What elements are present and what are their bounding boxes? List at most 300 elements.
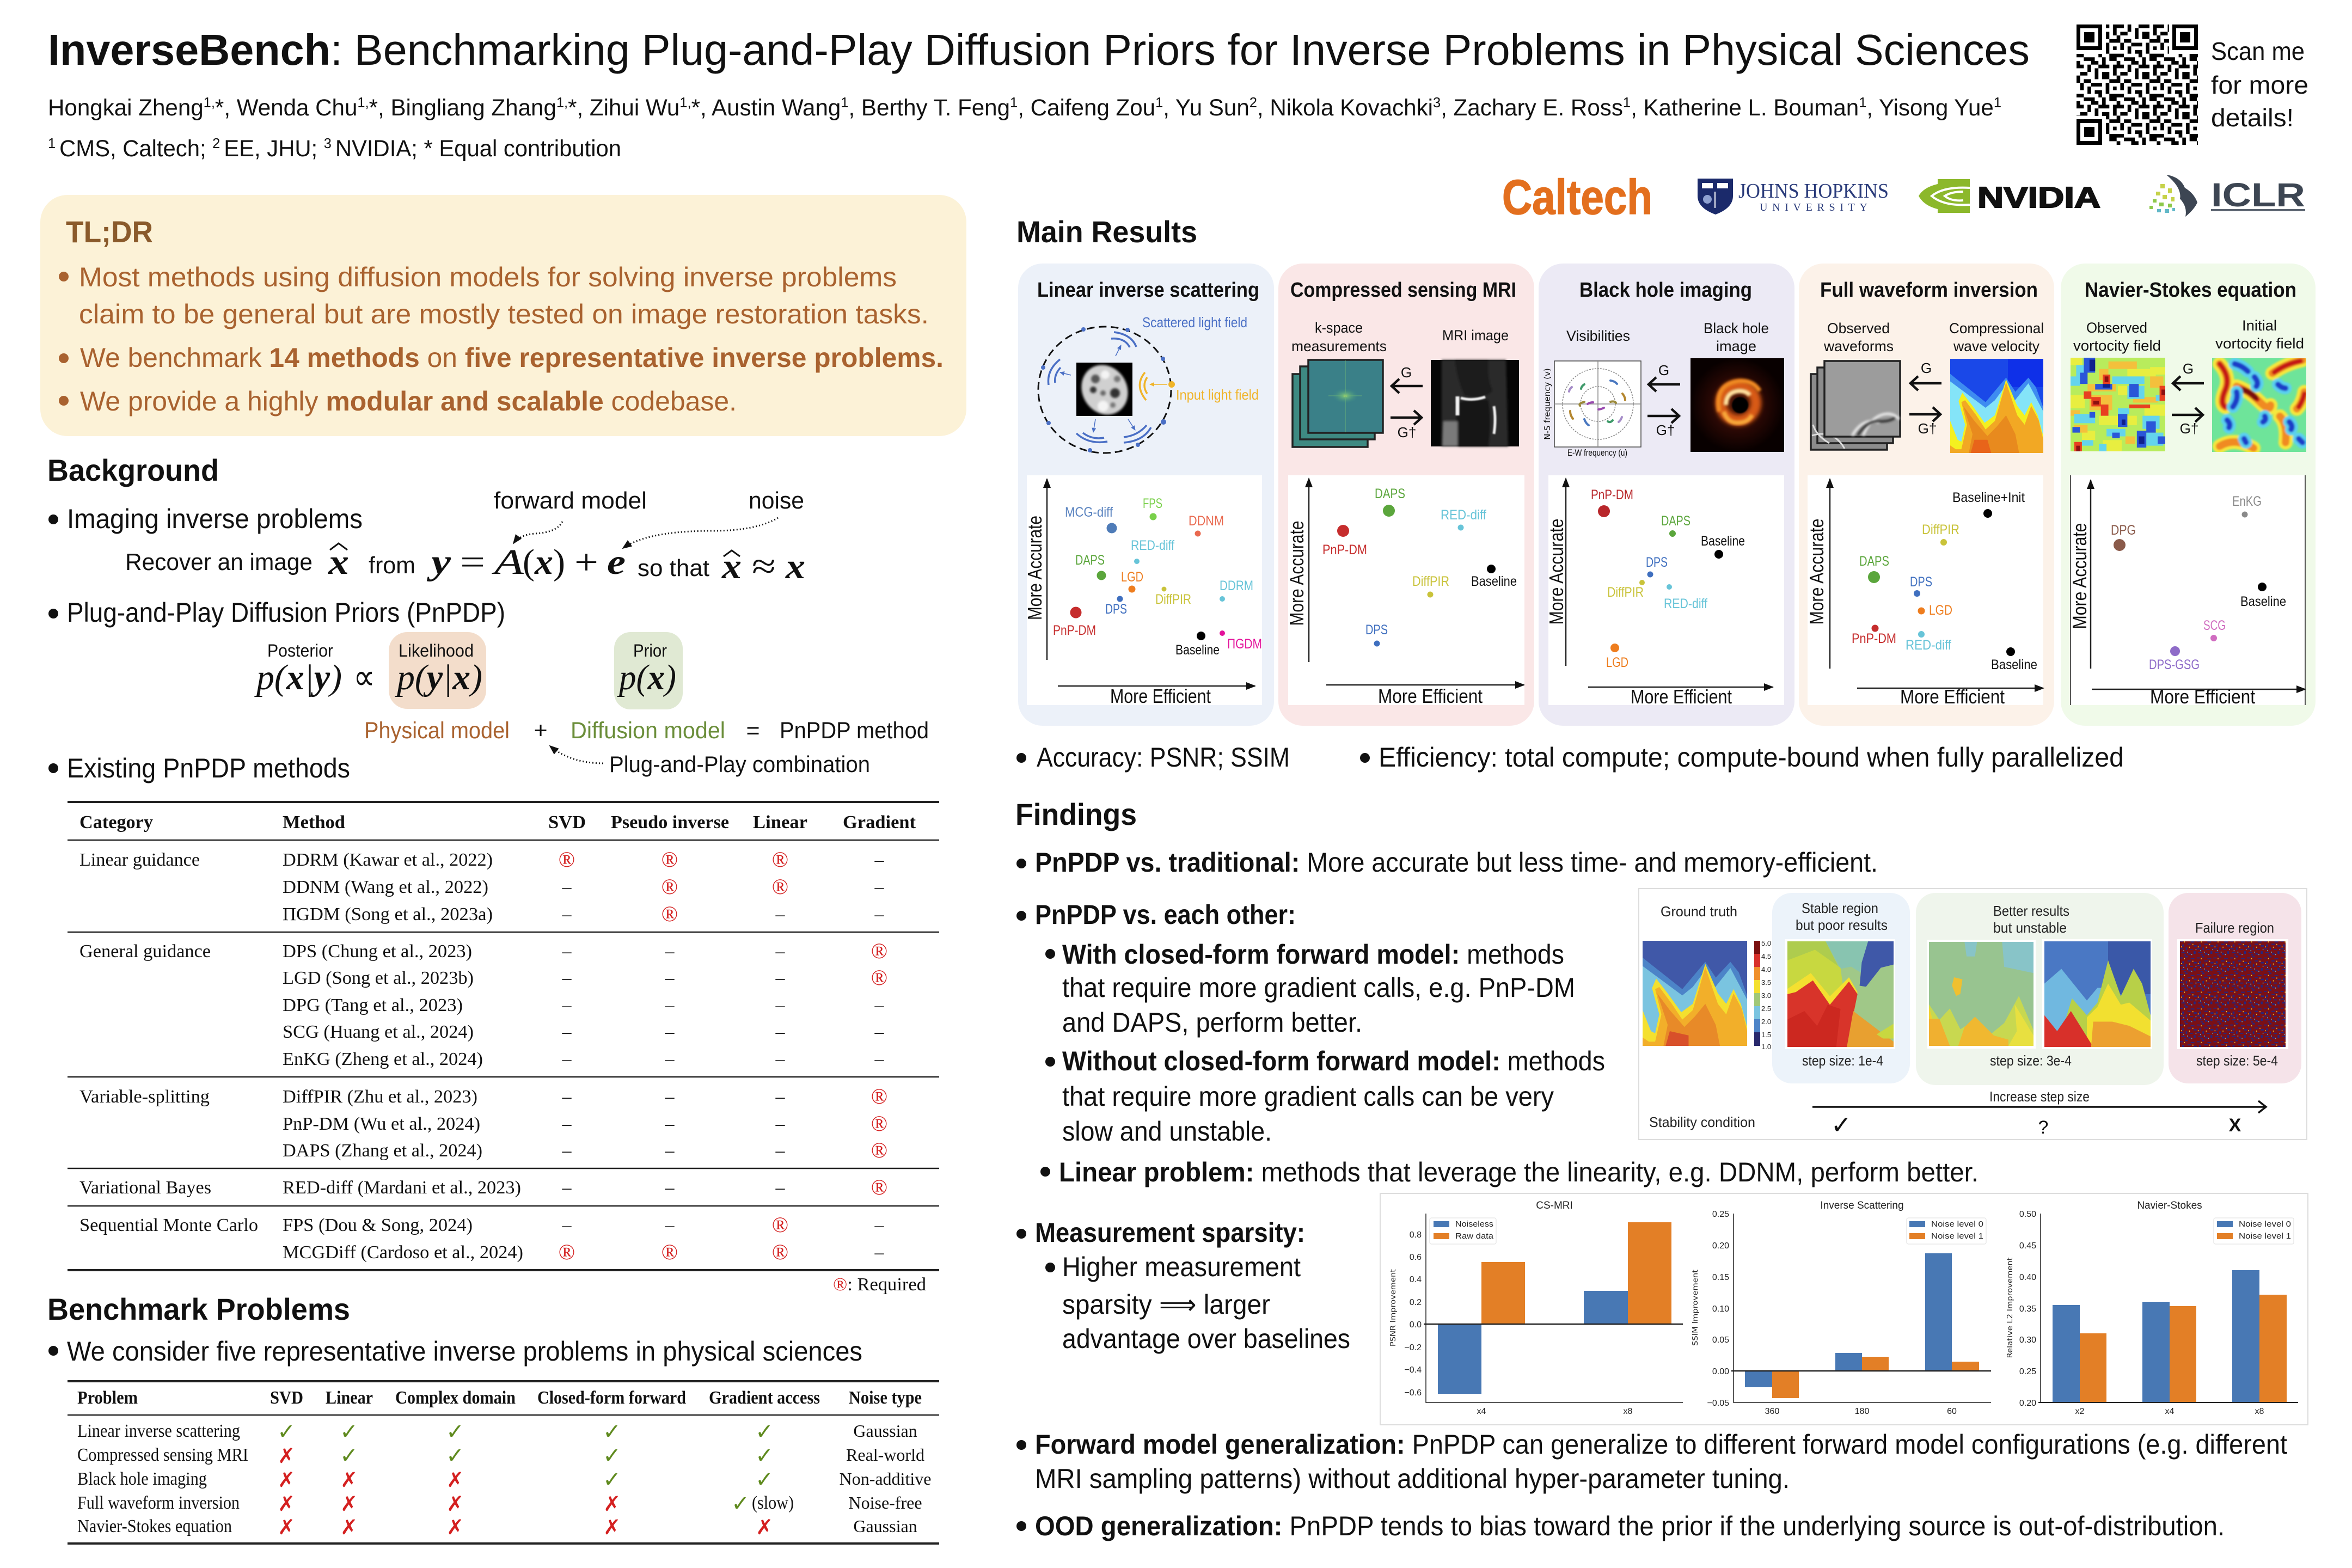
scatter chart: accuracy vs efficiency: Baseline+Init — [1952, 490, 2025, 505]
equation: forward problem: + — [574, 542, 598, 582]
table header: Gradient — [843, 812, 916, 832]
group: sequential Monte Carlo: FPS (Dou & Song, 2024) — [283, 1215, 473, 1235]
bar chart: Navier-Stokes: 0.50 — [2019, 1210, 2036, 1219]
affiliations: 2 — [212, 135, 224, 151]
QR caption: for more — [2211, 71, 2308, 99]
annotation: noise — [623, 487, 804, 548]
illustration: k-space and MRI: G† — [1398, 424, 1416, 440]
scatter chart: accuracy vs efficiency: More Efficient — [1378, 685, 1483, 707]
scatter chart: accuracy vs efficiency: DAPS — [1661, 513, 1690, 529]
illustration: visibilities and black hole: G — [1658, 362, 1669, 378]
formula: PnPDP combination — [364, 718, 929, 744]
authors: *, Zihui Wu — [568, 95, 679, 121]
authors: , Yisong Yue — [1866, 95, 1994, 121]
authors: 1, — [556, 94, 568, 111]
table header: Linear — [326, 1388, 373, 1408]
finding: vs each other: PnPDP vs. each other: — [1035, 899, 1296, 930]
bar chart: inverse scattering: 0.15 — [1712, 1273, 1729, 1282]
logo: Caltech: Caltech — [1502, 170, 1652, 225]
authors: 1 — [841, 94, 848, 111]
equation: forward problem: e — [607, 542, 626, 582]
bar chart: CS-MRI: 0.0 — [1410, 1320, 1422, 1330]
authors: 2 — [1250, 94, 1257, 111]
row: full waveform inversion: ✗✗✗✗ — [278, 1492, 621, 1516]
table header: Noise type — [849, 1388, 922, 1408]
scatter chart: accuracy vs efficiency: FPS — [1143, 496, 1162, 511]
group: variable-splitting: ––– — [562, 1141, 785, 1161]
table: benchmark problems — [68, 1380, 939, 1545]
arrow: increase step size: Increase step size — [1989, 1088, 2090, 1105]
scatter chart: accuracy vs efficiency: DPS — [1646, 555, 1668, 570]
affiliations: 3 — [324, 135, 335, 151]
bullet: accuracy metrics: Accuracy: PSNR; SSIM — [1037, 742, 1290, 773]
scatter chart: accuracy vs efficiency: PnP-DM — [1322, 542, 1367, 558]
logo: NVIDIA: NVIDIA — [1977, 181, 2100, 214]
bar chart: Navier-Stokes — [2006, 1200, 2298, 1416]
scatter chart: accuracy vs efficiency: Baseline — [1701, 534, 1745, 549]
scatter chart: accuracy vs efficiency: DPS — [1910, 574, 1932, 590]
scatter chart: accuracy vs efficiency: More Efficient — [1631, 685, 1732, 708]
scatter chart: accuracy vs efficiency: More Accurate — [1285, 520, 1308, 626]
authors: , Caifeng Zou — [1018, 95, 1155, 121]
bullet: most methods — [59, 262, 929, 329]
QR caption: details! — [2211, 103, 2294, 132]
row: black hole imaging: Non-additive — [840, 1469, 931, 1489]
scatter chart: accuracy vs efficiency: DAPS — [1859, 554, 1889, 569]
scatter chart: accuracy vs efficiency: DDNM — [1189, 513, 1224, 529]
panel: TL;DR — [40, 195, 966, 436]
scatter chart: accuracy vs efficiency: ΠGDM — [1227, 636, 1262, 652]
group: sequential Monte Carlo: MCGDiff (Cardoso et al., 2024) — [283, 1242, 523, 1263]
scatter chart: accuracy vs efficiency: EnKG — [2232, 494, 2262, 509]
bar chart: CS-MRI: PSNR Improvement — [1389, 1269, 1398, 1346]
row: Navier-Stokes equation: Navier-Stokes equation — [77, 1516, 232, 1536]
table header: Method — [283, 812, 345, 832]
equation: posterior: Posterior — [267, 641, 333, 660]
panel: Navier-Stokes equation — [2061, 264, 2316, 726]
group: linear guidance: ®®® — [559, 847, 788, 872]
scatter chart: accuracy vs efficiency: DAPS — [1375, 486, 1405, 501]
finding: measurement sparsity: Measurement sparsity: — [1035, 1217, 1305, 1248]
equation: forward problem: ≈ — [752, 547, 776, 586]
bar chart: Navier-Stokes: 0.40 — [2019, 1273, 2036, 1282]
group: variable-splitting: DAPS (Zhang et al., 2024) — [283, 1141, 482, 1161]
group: linear guidance: ––– — [562, 904, 884, 924]
illustration: visibilities and black hole: Visibilities — [1566, 328, 1630, 344]
scatter chart: accuracy vs efficiency: DDRM — [1220, 578, 1253, 593]
group: general guidance: –––– — [562, 1049, 884, 1069]
group: variational Bayes: ––– — [562, 1178, 785, 1198]
group: sequential Monte Carlo: Sequential Monte Carlo — [79, 1215, 258, 1235]
bar chart: Navier-Stokes: 0.25 — [2019, 1367, 2036, 1376]
bullet: imaging inverse problems: Imaging inverse problems — [67, 504, 363, 534]
scatter chart: accuracy vs efficiency: DiffPIR — [1607, 585, 1644, 600]
affiliations: NVIDIA; * Equal contribution — [335, 136, 621, 162]
scatter chart: accuracy vs efficiency: Baseline — [1991, 657, 2037, 672]
ground truth map: 5.0 — [1761, 939, 1771, 947]
authors: *, Wenda Chu — [215, 95, 357, 121]
illustration: k-space and MRI: k-space — [1315, 320, 1363, 336]
equation: posterior — [254, 641, 375, 698]
stability condition row: X — [2229, 1115, 2241, 1136]
group: sequential Monte Carlo: ®®® — [559, 1240, 788, 1264]
authors: , Berthy T. Feng — [848, 95, 1010, 121]
scatter chart: accuracy vs efficiency: RED-diff — [1906, 638, 1951, 653]
failure region: Failure region — [2195, 920, 2274, 936]
authors: 1 — [1623, 94, 1631, 111]
figure: sparsity bar charts — [1380, 1193, 2308, 1425]
title: InverseBench: Benchmarking Plug-and-Play Diffusion Priors for Inverse Problems in Physical Sciences — [48, 26, 2030, 74]
table header: Category — [79, 812, 153, 832]
authors: 1, — [357, 94, 369, 111]
logo: Johns Hopkins — [1698, 179, 1889, 215]
bar chart: CS-MRI: x8 — [1624, 1407, 1633, 1416]
bullet: efficiency metrics: Efficiency: total compute; compute-bound when fully parallelized — [1379, 742, 2124, 773]
bar chart: Navier-Stokes: x8 — [2255, 1407, 2264, 1416]
annotation: plug-and-play combination — [550, 746, 870, 777]
scatter chart: accuracy vs efficiency: LGD — [1606, 655, 1628, 670]
stable region: Stable region — [1802, 900, 1878, 916]
bar chart: inverse scattering: 360 — [1765, 1407, 1779, 1416]
row: compressed sensing MRI: Real-world — [846, 1445, 924, 1465]
illustration: waveforms and velocity: Compressional — [1949, 320, 2044, 336]
arrow: increase step size — [1812, 1088, 2266, 1113]
scatter chart: accuracy vs efficiency — [1024, 475, 1262, 707]
equation: forward problem: A — [492, 542, 524, 582]
scatter chart: accuracy vs efficiency: RED-diff — [1131, 538, 1174, 553]
bar chart: Navier-Stokes: 0.30 — [2019, 1336, 2036, 1345]
logo: ICLR: ICLR — [2211, 176, 2305, 213]
illustration: waveforms and velocity: G† — [1918, 420, 1937, 437]
group: variable-splitting: ––– — [562, 1114, 785, 1134]
group: sequential Monte Carlo: ® — [772, 1212, 788, 1237]
table header — [79, 812, 916, 832]
equation: forward problem: Recover an image — [125, 549, 313, 575]
logo: ICLR — [2149, 175, 2305, 217]
stability condition row: Stability condition — [1649, 1114, 1755, 1130]
group: linear guidance — [79, 847, 884, 926]
finding: vs each other — [1016, 899, 1979, 1187]
formula: PnPDP combination: = — [746, 718, 760, 744]
group: variational Bayes: ® — [871, 1175, 887, 1199]
box: likelihood — [389, 632, 486, 709]
annotation: plug-and-play combination: Plug-and-Play combination — [609, 751, 870, 777]
figure: stability vs step size — [1639, 889, 2307, 1140]
bar chart: inverse scattering: 0.05 — [1712, 1336, 1729, 1345]
ground truth map: 3.5 — [1761, 978, 1771, 987]
sub-finding: linear problem: Linear problem: methods that leverage the linearity, e.g. DDNM, perform better. — [1059, 1157, 1979, 1187]
illustration: scattering setup: Scattered light field — [1142, 314, 1247, 330]
group: linear guidance: DDRM (Kawar et al., 2022) — [283, 850, 493, 870]
sub-finding: with closed-form: and DAPS, perform better. — [1062, 1007, 1362, 1038]
bar chart: inverse scattering: 0.25 — [1712, 1210, 1729, 1219]
illustration: vorticity fields — [2071, 317, 2306, 452]
table header: SVD — [270, 1388, 303, 1408]
sub-finding: without closed-form — [1045, 1046, 1605, 1147]
equation: forward problem: ( — [523, 542, 535, 582]
row: full waveform inversion: Noise-free — [848, 1493, 922, 1512]
ground truth map: 2.5 — [1761, 1004, 1771, 1013]
finding: measurement sparsity: sparsity ⟹ larger — [1062, 1289, 1270, 1320]
heading: TL;DR: TL;DR — [66, 215, 153, 249]
authors: , Yu Sun — [1163, 95, 1250, 121]
bar chart: Navier-Stokes: 0.45 — [2019, 1241, 2036, 1251]
illustration: k-space and MRI: MRI image — [1442, 327, 1509, 344]
illustration: waveforms and velocity: waveforms — [1823, 338, 1894, 354]
group: sequential Monte Carlo — [79, 1212, 884, 1264]
logo: Johns Hopkins: JOHNS HOPKINS — [1738, 180, 1889, 203]
illustration: visibilities and black hole: Black hole — [1704, 320, 1769, 336]
row: compressed sensing MRI: Compressed sensing MRI — [77, 1445, 248, 1465]
equation: forward problem: y — [426, 542, 451, 582]
table header: Pseudo inverse — [611, 812, 729, 832]
table legend: required: ®: Required — [833, 1275, 926, 1295]
bar chart: Navier-Stokes: x2 — [2075, 1407, 2085, 1416]
panel title: Full waveform inversion — [1820, 279, 2038, 302]
row: compressed sensing MRI: ✗ — [278, 1444, 295, 1468]
affiliations: EE, JHU; — [224, 136, 324, 162]
failure region: step size: 5e-4 — [2196, 1052, 2278, 1069]
finding: measurement sparsity: advantage over baselines — [1062, 1324, 1350, 1354]
panel title: Black hole imaging — [1579, 279, 1752, 302]
bar chart: CS-MRI: −0.4 — [1404, 1365, 1422, 1375]
authors: 1, — [204, 94, 215, 111]
illustration: waveforms and velocity: Observed — [1827, 320, 1890, 336]
sub-finding: without closed-form: that require more gradient calls can be very — [1062, 1081, 1554, 1112]
group: general guidance: –––– — [562, 995, 884, 1015]
ground truth map: 4.5 — [1761, 952, 1771, 960]
finding: measurement sparsity — [1016, 1217, 1350, 1354]
affiliations: CMS, Caltech; — [59, 136, 212, 162]
ground truth map — [1643, 903, 1771, 1051]
bullet: codebase: We provide a highly modular and scalable codebase. — [80, 386, 737, 416]
row: black hole imaging — [77, 1467, 931, 1492]
bullet: most methods: claim to be general but are mostly tested on image restoration tasks. — [79, 299, 929, 329]
bar chart: CS-MRI: 0.8 — [1410, 1230, 1422, 1240]
row: Navier-Stokes equation — [77, 1515, 917, 1539]
bar chart: inverse scattering: 0.00 — [1712, 1367, 1729, 1376]
finding: vs traditional: PnPDP vs. traditional: More accurate but less time- and memory-efficient. — [1035, 847, 1878, 878]
failure region — [2169, 893, 2301, 1083]
row: full waveform inversion — [77, 1491, 922, 1516]
panel: black hole imaging — [1539, 264, 1794, 726]
row: linear inverse scattering: ✓✓✓✓✓ — [277, 1419, 774, 1444]
scatter chart: accuracy vs efficiency: More Accurate — [1805, 518, 1828, 625]
bar chart: inverse scattering: −0.05 — [1707, 1399, 1729, 1408]
illustration: vorticity fields: Initial — [2242, 317, 2277, 334]
bar chart: inverse scattering: 0.20 — [1712, 1241, 1729, 1251]
scatter chart: accuracy vs efficiency: DiffPIR — [1412, 574, 1449, 589]
QR caption: Scan me — [2211, 37, 2305, 65]
authors: 1 — [1859, 94, 1866, 111]
bullet: PnPDP: Plug-and-Play Diffusion Priors (PnPDP) — [67, 597, 505, 628]
group: general guidance: DPS (Chung et al., 2023) — [283, 941, 472, 961]
equation: forward problem: x — [534, 542, 553, 582]
box: prior: p(x) — [617, 658, 676, 697]
table header: Complex domain — [395, 1388, 516, 1408]
heading: Background: Background — [47, 453, 219, 487]
authors: , Katherine L. Bouman — [1631, 95, 1859, 121]
equation: forward problem: x — [785, 547, 805, 586]
stability condition row — [1649, 1110, 2241, 1140]
group: general guidance: EnKG (Zheng et al., 2024) — [283, 1049, 483, 1069]
authors: 3 — [1433, 94, 1441, 111]
better results: but unstable — [1993, 920, 2067, 936]
row: black hole imaging: ✓✓ — [603, 1467, 774, 1492]
ground truth map: 2.0 — [1761, 1018, 1771, 1026]
bar chart: inverse scattering: SSIM Improvement — [1692, 1270, 1700, 1346]
bar chart: inverse scattering: Noise level 1 — [1931, 1232, 1983, 1241]
panel title: Linear inverse scattering — [1037, 279, 1259, 302]
illustration: scattering setup: Input light field — [1176, 387, 1259, 403]
ground truth map: 4.0 — [1761, 965, 1771, 973]
equation: forward problem — [125, 542, 805, 586]
better results — [1916, 893, 2164, 1085]
bar chart: inverse scattering: Inverse Scattering — [1820, 1200, 1904, 1211]
group: general guidance — [79, 939, 887, 1069]
annotation: forward model — [494, 487, 647, 543]
bullet: existing methods: Existing PnPDP methods — [67, 753, 350, 783]
bar chart: CS-MRI: −0.2 — [1404, 1343, 1422, 1352]
bar chart: inverse scattering: Noise level 0 — [1931, 1220, 1983, 1229]
illustration: waveforms and velocity: G — [1921, 360, 1932, 376]
equation: forward problem: x — [328, 542, 349, 582]
scatter chart: accuracy vs efficiency: DPS-GSG — [2149, 657, 2200, 672]
annotation: forward model: forward model — [494, 487, 647, 514]
group: general guidance: LGD (Song et al., 2023b) — [283, 968, 474, 988]
illustration: vorticity fields: G† — [2180, 420, 2198, 437]
bar chart: Navier-Stokes: Navier-Stokes — [2137, 1200, 2202, 1211]
affiliations: 1 — [48, 135, 59, 151]
illustration: visibilities and black hole: E-W frequency (u) — [1567, 448, 1627, 458]
formula: PnPDP combination: Physical model — [364, 718, 510, 744]
scatter chart: accuracy vs efficiency: DAPS — [1075, 553, 1105, 568]
row: full waveform inversion: ✓ — [731, 1491, 750, 1516]
row: linear inverse scattering: Gaussian — [853, 1421, 917, 1441]
illustration: k-space and MRI: measurements — [1291, 338, 1387, 354]
group: linear guidance: ® — [661, 902, 678, 926]
ground truth map: 3.0 — [1761, 991, 1771, 1000]
group: linear guidance: ΠGDM (Song et al., 2023a) — [283, 904, 493, 924]
finding: forward model generalization: MRI sampling patterns) without additional hyper-parameter tuning. — [1035, 1463, 1790, 1494]
bar chart: Navier-Stokes: Noise level 0 — [2239, 1220, 2291, 1229]
row: compressed sensing MRI: ✓✓✓✓ — [340, 1443, 774, 1468]
group: linear guidance: –– — [562, 877, 884, 897]
group: linear guidance: – — [874, 850, 884, 870]
group: variational Bayes: RED-diff (Mardani et al., 2023) — [283, 1178, 521, 1198]
illustration: vorticity fields: Observed — [2086, 320, 2147, 336]
authors: 1, — [679, 94, 691, 111]
row: compressed sensing MRI — [77, 1443, 924, 1468]
scatter chart: accuracy vs efficiency — [1285, 475, 1524, 707]
group: variational Bayes — [79, 1175, 887, 1199]
authors: *, Austin Wang — [691, 95, 841, 121]
row: Navier-Stokes equation: ✗✗✗✗✗ — [278, 1515, 773, 1539]
logo: NVIDIA — [1919, 179, 2100, 214]
group: variable-splitting: DiffPIR (Zhu et al., 2023) — [283, 1087, 477, 1107]
group: general guidance: SCG (Huang et al., 2024) — [283, 1022, 474, 1042]
scatter chart: accuracy vs efficiency — [1805, 475, 2043, 708]
equation: posterior: p(x|y) — [254, 658, 342, 697]
finding: forward model generalization: Forward model generalization: PnPDP can generalize to different forward model configurations (e.g. different — [1035, 1429, 2287, 1460]
group: linear guidance: ®® — [661, 874, 788, 899]
bar chart: CS-MRI: Raw data — [1455, 1232, 1494, 1241]
heading: Findings: Findings — [1015, 797, 1137, 831]
illustration: scattering setup — [1038, 314, 1259, 453]
bar chart: Navier-Stokes: 0.35 — [2019, 1304, 2036, 1314]
stable region: step size: 1e-4 — [1802, 1052, 1883, 1069]
scatter chart: accuracy vs efficiency: Baseline — [1471, 574, 1517, 589]
sub-finding: with closed-form — [1045, 939, 1575, 1038]
scatter chart: accuracy vs efficiency: LGD — [1929, 603, 1952, 618]
scatter chart: accuracy vs efficiency: MCG-diff — [1065, 505, 1113, 520]
bullet: benchmark: We benchmark 14 methods on five representative inverse problems. — [80, 342, 944, 373]
sub-finding: with closed-form: that require more gradient calls, e.g. PnP-DM — [1062, 972, 1575, 1003]
group: general guidance: ® — [871, 939, 887, 963]
scatter chart: accuracy vs efficiency: PnP-DM — [1053, 623, 1096, 638]
annotation: noise: noise — [749, 487, 804, 514]
formula: PnPDP combination: + — [534, 718, 548, 744]
bar chart: inverse scattering: 180 — [1855, 1407, 1869, 1416]
bar chart: CS-MRI: CS-MRI — [1536, 1200, 1573, 1211]
group: variable-splitting: ® — [871, 1111, 887, 1136]
scatter chart: accuracy vs efficiency: PnP-DM — [1591, 487, 1633, 503]
illustration: k-space and MRI — [1291, 320, 1519, 447]
group: variable-splitting: ––– — [562, 1087, 785, 1107]
formula: PnPDP combination: PnPDP method — [780, 718, 929, 744]
sub-finding: without closed-form: slow and unstable. — [1062, 1116, 1272, 1147]
illustration: vorticity fields: G — [2183, 360, 2194, 377]
bar chart: CS-MRI: x4 — [1477, 1407, 1486, 1416]
table header: Problem — [77, 1388, 138, 1408]
panel title: Compressed sensing MRI — [1290, 279, 1516, 302]
table: existing PnPDP methods — [68, 801, 939, 1271]
scatter chart: accuracy vs efficiency: DPS — [1365, 622, 1388, 638]
group: variational Bayes: Variational Bayes — [79, 1178, 211, 1198]
equation: forward problem: x — [721, 547, 742, 586]
QR code — [2073, 21, 2202, 149]
scatter chart: accuracy vs efficiency: SCG — [2203, 618, 2226, 633]
authors: *, Bingliang Zhang — [369, 95, 556, 121]
row: Navier-Stokes equation: Gaussian — [853, 1516, 917, 1536]
better results: step size: 3e-4 — [1990, 1052, 2072, 1069]
row: black hole imaging: Black hole imaging — [77, 1469, 207, 1489]
sub-finding: without closed-form: Without closed-form forward model: methods — [1062, 1046, 1605, 1076]
box: prior: Prior — [633, 641, 667, 660]
scatter chart: accuracy vs efficiency: More Efficient — [1110, 685, 1211, 707]
group: linear guidance: DDNM (Wang et al., 2022) — [283, 877, 488, 897]
table header — [77, 1388, 922, 1408]
group: variable-splitting: ® — [871, 1138, 887, 1162]
group: sequential Monte Carlo: ––– — [562, 1215, 884, 1235]
scatter chart: accuracy vs efficiency: Baseline — [2240, 594, 2286, 609]
table header: Closed-form forward — [537, 1388, 686, 1408]
heading: Benchmark Problems: Benchmark Problems — [47, 1292, 350, 1326]
row: black hole imaging: ✗✗✗ — [278, 1468, 464, 1492]
scatter chart: accuracy vs efficiency: RED-diff — [1664, 596, 1707, 611]
scatter chart: accuracy vs efficiency: More Efficient — [1900, 685, 2005, 708]
heading: Main Results: Main Results — [1016, 215, 1197, 249]
bar chart: inverse scattering: 60 — [1947, 1407, 1957, 1416]
panel: compressed sensing MRI — [1278, 264, 1534, 726]
stability condition row: ? — [2038, 1117, 2048, 1138]
ground truth map: Ground truth — [1661, 903, 1737, 920]
equation: forward problem: from — [369, 552, 415, 579]
scatter chart: accuracy vs efficiency — [1545, 475, 1784, 708]
scatter chart: accuracy vs efficiency: DPS — [1105, 602, 1127, 617]
scatter chart: accuracy vs efficiency: Baseline — [1175, 642, 1220, 658]
scatter chart: accuracy vs efficiency: More Accurate — [1545, 518, 1567, 625]
